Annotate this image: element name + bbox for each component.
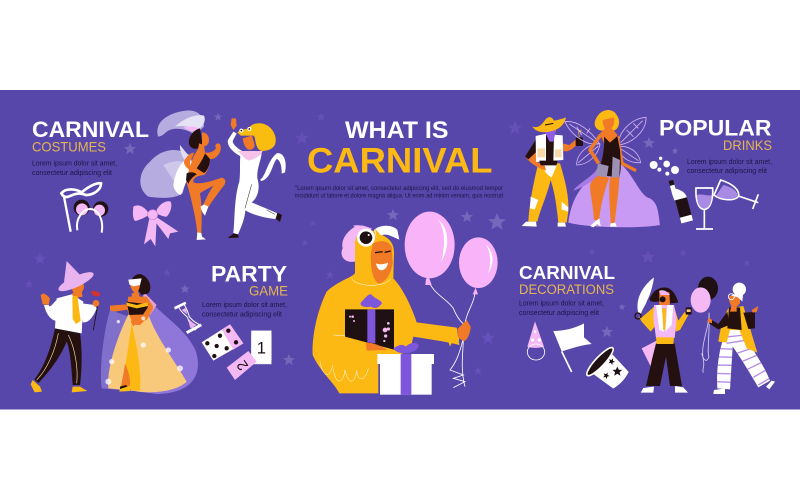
section: popular drinks heading: Lorem ipsum dolor sit amet, <box>687 159 772 166</box>
section: carnival costumes heading: CARNIVAL <box>32 117 149 142</box>
section: carnival decorations heading: consectetur adipiscing elit <box>519 310 599 317</box>
section: party game heading: Lorem ipsum dolor sit amet, <box>202 302 287 309</box>
icon: wine glass tilted <box>714 180 758 209</box>
icon: domino <box>202 324 243 361</box>
icon: ticket number 2: 2 <box>234 357 252 373</box>
section: popular drinks heading: POPULAR <box>659 116 772 141</box>
icon: ticket number 1 <box>251 331 271 364</box>
black gift box <box>345 294 394 351</box>
party game illustrations <box>31 261 271 394</box>
section: party game heading <box>202 262 288 319</box>
chicken costume <box>313 225 459 393</box>
icon: party hat <box>527 321 545 360</box>
balloons black and pink <box>691 277 718 373</box>
white gift box <box>377 343 434 395</box>
title: what is carnival <box>307 117 492 181</box>
figure: fairy with wings <box>565 110 660 227</box>
icon: mouse ears headband <box>74 200 108 233</box>
section: carnival costumes heading: COSTUMES <box>32 139 106 155</box>
figure: woman in ball gown <box>101 274 198 394</box>
figure: pirate <box>635 277 692 393</box>
icon: top hat <box>584 345 634 396</box>
section: carnival decorations heading: CARNIVAL <box>519 263 615 283</box>
costumes illustrations <box>61 111 286 246</box>
title: what is carnival: WHAT IS <box>345 117 448 144</box>
figure: woman in striped trousers <box>707 283 775 394</box>
section: carnival costumes heading: Lorem ipsum dolor sit amet, <box>32 161 117 168</box>
section: carnival costumes heading <box>32 117 149 177</box>
title: what is carnival: CARNIVAL <box>307 142 492 181</box>
icon: hourglass <box>174 302 202 334</box>
section: popular drinks heading <box>659 116 772 175</box>
icon: pink bow <box>133 201 178 246</box>
intro text: incididunt ut labore et dolore magna aliqua. Ut enim ad minim veniam, quis nostrud <box>295 194 503 200</box>
section: party game heading: PARTY <box>211 262 287 287</box>
section: carnival decorations heading: Lorem ipsum dolor sit amet, <box>519 301 604 308</box>
section: party game heading: consectetur adipiscing elit <box>202 312 282 319</box>
section: popular drinks heading: consectetur adipiscing elit <box>687 168 767 175</box>
icon: ticket number 1: 1 <box>257 339 266 358</box>
icon: party mask on stick <box>61 183 101 232</box>
background panel <box>0 90 800 410</box>
background stars <box>24 112 750 375</box>
intro text <box>295 186 503 200</box>
figure: white costume woman <box>228 118 286 238</box>
hand holding balloons <box>457 320 471 341</box>
icon: white flag <box>553 323 592 372</box>
figure: showgirl dancer <box>140 111 225 240</box>
section: party game heading: GAME <box>249 283 288 299</box>
icon: ticket number 2 <box>227 351 257 380</box>
section: popular drinks heading: DRINKS <box>723 137 772 153</box>
central figure: man in chicken costume with gifts and balloons <box>313 212 498 395</box>
decorations illustrations <box>527 277 775 396</box>
section: carnival decorations heading <box>519 263 615 317</box>
balloons <box>405 212 498 388</box>
icon: bubbles <box>650 157 679 176</box>
figure: man in witch hat <box>31 261 100 392</box>
intro text: "Lorem ipsum dolor sit amet, consectetur adipiscing elit, sed do eiusmod tempor <box>295 186 503 192</box>
section: carnival costumes heading: consectetur adipiscing elit <box>32 170 112 177</box>
popular drinks illustrations <box>522 110 758 229</box>
icon: wine glass upright <box>696 188 713 229</box>
icon: champagne bottle <box>669 178 693 224</box>
figure: cowboy <box>522 117 583 227</box>
section: carnival decorations heading: DECORATIONS <box>519 282 614 297</box>
